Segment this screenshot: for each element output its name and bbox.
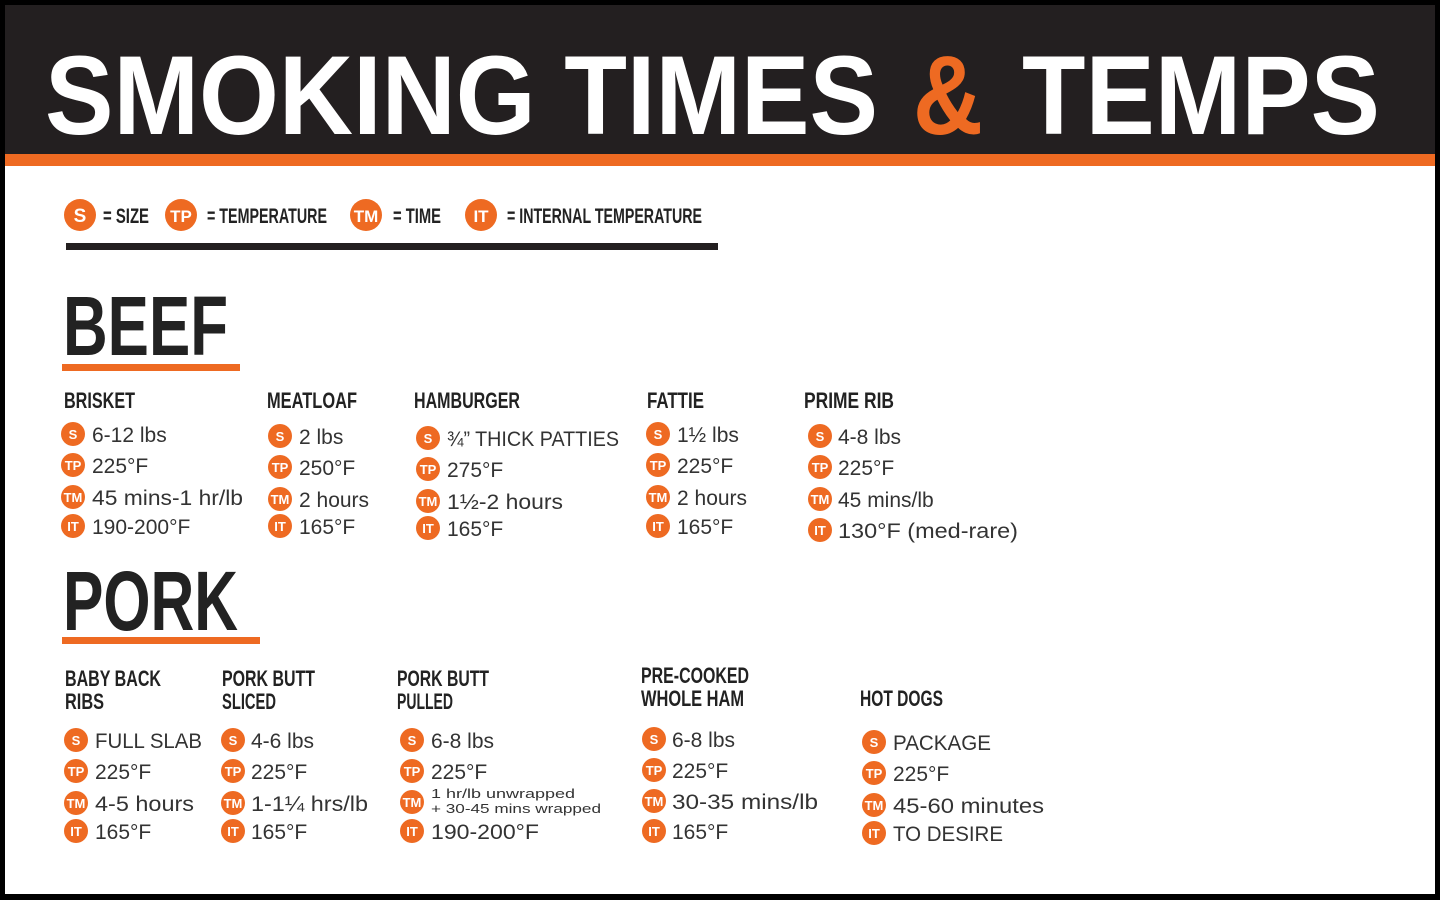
panel: brisket: 6-12 lbs bbox=[92, 424, 167, 447]
legend: = TEMPERATURE bbox=[207, 205, 327, 228]
panel: pre-cooked whole ham bbox=[641, 663, 818, 844]
panel: pork butt sliced: 1-1¼ hrs/lb bbox=[251, 793, 368, 816]
panel: pork butt sliced bbox=[221, 666, 368, 844]
panel: hot dogs: HOT DOGS bbox=[860, 686, 943, 711]
legend: S bbox=[74, 206, 86, 227]
panel: hamburger: 165°F bbox=[447, 518, 503, 541]
panel: baby back ribs: 165°F bbox=[95, 821, 151, 844]
panel: meatloaf: IT bbox=[274, 519, 286, 534]
panel: brisket: 225°F bbox=[92, 455, 148, 478]
panel: baby back ribs: TP bbox=[68, 764, 85, 779]
panel: brisket: TM bbox=[64, 490, 82, 505]
panel: pork butt sliced: PORK BUTT bbox=[222, 666, 315, 691]
panel: baby back ribs bbox=[64, 666, 202, 844]
panel: hot dogs: 225°F bbox=[893, 763, 949, 786]
legend bbox=[64, 199, 718, 250]
panel: pork butt pulled: IT bbox=[406, 824, 418, 839]
panel: brisket: TP bbox=[65, 458, 82, 473]
panel: meatloaf: 2 lbs bbox=[299, 426, 343, 449]
panel: meatloaf: 250°F bbox=[299, 457, 355, 480]
panel: prime rib: 225°F bbox=[838, 457, 894, 480]
panel: fattie: 1½ lbs bbox=[677, 424, 739, 447]
panel: pork butt pulled: 6-8 lbs bbox=[431, 730, 494, 753]
panel: pork butt sliced: 225°F bbox=[251, 761, 307, 784]
panel: fattie: 165°F bbox=[677, 516, 733, 539]
panel: hamburger bbox=[414, 388, 619, 541]
panel: baby back ribs: BABY BACK bbox=[65, 666, 161, 691]
panel: baby back ribs: TM bbox=[67, 796, 85, 811]
legend: TM bbox=[354, 207, 378, 226]
panel: prime rib bbox=[804, 388, 1018, 543]
panel: baby back ribs: 225°F bbox=[95, 761, 151, 784]
panel: brisket: BRISKET bbox=[64, 388, 135, 413]
panel: hamburger: 275°F bbox=[447, 459, 503, 482]
panel: brisket: 45 mins-1 hr/lb bbox=[92, 487, 243, 510]
panel: fattie: TP bbox=[650, 458, 667, 473]
panel: meatloaf: 165°F bbox=[299, 516, 355, 539]
panel: fattie bbox=[646, 388, 747, 539]
panel: pork butt pulled: 190-200°F bbox=[431, 821, 539, 844]
panel: hot dogs: 45-60 minutes bbox=[893, 795, 1044, 818]
panel: hamburger: TM bbox=[419, 494, 437, 509]
panel: baby back ribs: RIBS bbox=[65, 689, 104, 714]
title: TEMPS bbox=[1022, 33, 1380, 158]
panel: prime rib: 45 mins/lb bbox=[838, 489, 934, 512]
heading: BEEF: BEEF bbox=[63, 279, 228, 373]
panel: prime rib: IT bbox=[814, 523, 826, 538]
panel: prime rib: TM bbox=[811, 492, 829, 507]
panel: pork butt pulled: PULLED bbox=[397, 689, 453, 714]
header banner bbox=[5, 5, 1435, 166]
panel: meatloaf: MEATLOAF bbox=[267, 388, 357, 413]
panel: pork butt pulled: TP bbox=[404, 764, 421, 779]
panel: pre-cooked whole ham: 165°F bbox=[672, 821, 728, 844]
legend: = INTERNAL TEMPERATURE bbox=[507, 205, 702, 228]
panel: hamburger: TP bbox=[420, 462, 437, 477]
panel: pork butt sliced: TP bbox=[225, 764, 242, 779]
panel: pork butt sliced: 4-6 lbs bbox=[251, 730, 314, 753]
panel: brisket bbox=[61, 388, 243, 539]
panel: pork butt pulled: + 30-45 mins wrapped bbox=[431, 801, 601, 816]
panel: pre-cooked whole ham: 6-8 lbs bbox=[672, 729, 735, 752]
panel: brisket: 190-200°F bbox=[92, 516, 190, 539]
panel: prime rib: TP bbox=[812, 460, 829, 475]
panel: hamburger: ¾” THICK PATTIES bbox=[447, 428, 619, 451]
panel: hot dogs bbox=[860, 686, 1044, 846]
panel: hot dogs: TM bbox=[865, 798, 883, 813]
panel: pork butt pulled: 1 hr/lb unwrapped bbox=[431, 786, 575, 801]
panel: pre-cooked whole ham: TM bbox=[645, 794, 663, 809]
panel: fattie: IT bbox=[652, 519, 664, 534]
panel: fattie: S bbox=[654, 427, 663, 442]
title: SMOKING TIMES bbox=[45, 33, 878, 158]
panel: hot dogs: TO DESIRE bbox=[893, 823, 1003, 846]
panel: baby back ribs: IT bbox=[70, 824, 82, 839]
panel: prime rib: S bbox=[816, 429, 825, 444]
panel: prime rib: 130°F (med-rare) bbox=[838, 520, 1018, 543]
panel: pork butt pulled: 225°F bbox=[431, 761, 487, 784]
panel: meatloaf: 2 hours bbox=[299, 489, 369, 512]
panel: hot dogs: IT bbox=[868, 826, 880, 841]
panel: hamburger: 1½-2 hours bbox=[447, 491, 563, 514]
legend: TP bbox=[170, 207, 192, 226]
panel: fattie: TM bbox=[649, 490, 667, 505]
panel: hot dogs: S bbox=[870, 735, 879, 750]
panel: meatloaf bbox=[267, 388, 369, 539]
panel: meatloaf: S bbox=[276, 429, 285, 444]
panel: pork butt pulled: TM bbox=[403, 795, 421, 810]
panel: hot dogs: PACKAGE bbox=[893, 732, 991, 755]
panel: pre-cooked whole ham: IT bbox=[648, 824, 660, 839]
panel: pork butt sliced: IT bbox=[227, 824, 239, 839]
panel: pork butt sliced: 165°F bbox=[251, 821, 307, 844]
panel: pre-cooked whole ham: 225°F bbox=[672, 760, 728, 783]
heading: PORK: PORK bbox=[63, 554, 238, 648]
title: & bbox=[913, 33, 983, 158]
panel: fattie: 225°F bbox=[677, 455, 733, 478]
panel: fattie: 2 hours bbox=[677, 487, 747, 510]
panel: pork butt sliced: TM bbox=[224, 796, 242, 811]
panel: pre-cooked whole ham: TP bbox=[646, 763, 663, 778]
panel: hot dogs: TP bbox=[866, 766, 883, 781]
panel: brisket: IT bbox=[67, 519, 79, 534]
panel: pre-cooked whole ham: WHOLE HAM bbox=[641, 686, 744, 711]
panel: meatloaf: TP bbox=[272, 460, 289, 475]
panel: pre-cooked whole ham: S bbox=[650, 732, 659, 747]
panel: pre-cooked whole ham: 30-35 mins/lb bbox=[672, 791, 818, 814]
panel: pork butt pulled: PORK BUTT bbox=[397, 666, 489, 691]
panel: pork butt pulled: S bbox=[408, 733, 417, 748]
panel: pre-cooked whole ham: PRE-COOKED bbox=[641, 663, 749, 688]
legend: = SIZE bbox=[103, 205, 149, 228]
panel: prime rib: 4-8 lbs bbox=[838, 426, 901, 449]
panel: prime rib: PRIME RIB bbox=[804, 388, 894, 413]
legend: = TIME bbox=[393, 205, 441, 228]
panel: hamburger: HAMBURGER bbox=[414, 388, 520, 413]
panel: brisket: S bbox=[69, 427, 78, 442]
title bbox=[45, 33, 1380, 158]
panel: pork butt sliced: S bbox=[229, 733, 238, 748]
panel: baby back ribs: FULL SLAB bbox=[95, 730, 202, 753]
panel: pork butt sliced: SLICED bbox=[222, 689, 276, 714]
panel: pork butt pulled bbox=[397, 666, 601, 844]
legend: IT bbox=[473, 207, 489, 226]
panel: baby back ribs: 4-5 hours bbox=[95, 793, 194, 816]
panel: hamburger: S bbox=[424, 431, 433, 446]
panel: fattie: FATTIE bbox=[647, 388, 704, 413]
panel: hamburger: IT bbox=[422, 521, 434, 536]
panel: baby back ribs: S bbox=[72, 733, 81, 748]
panel: meatloaf: TM bbox=[271, 492, 289, 507]
